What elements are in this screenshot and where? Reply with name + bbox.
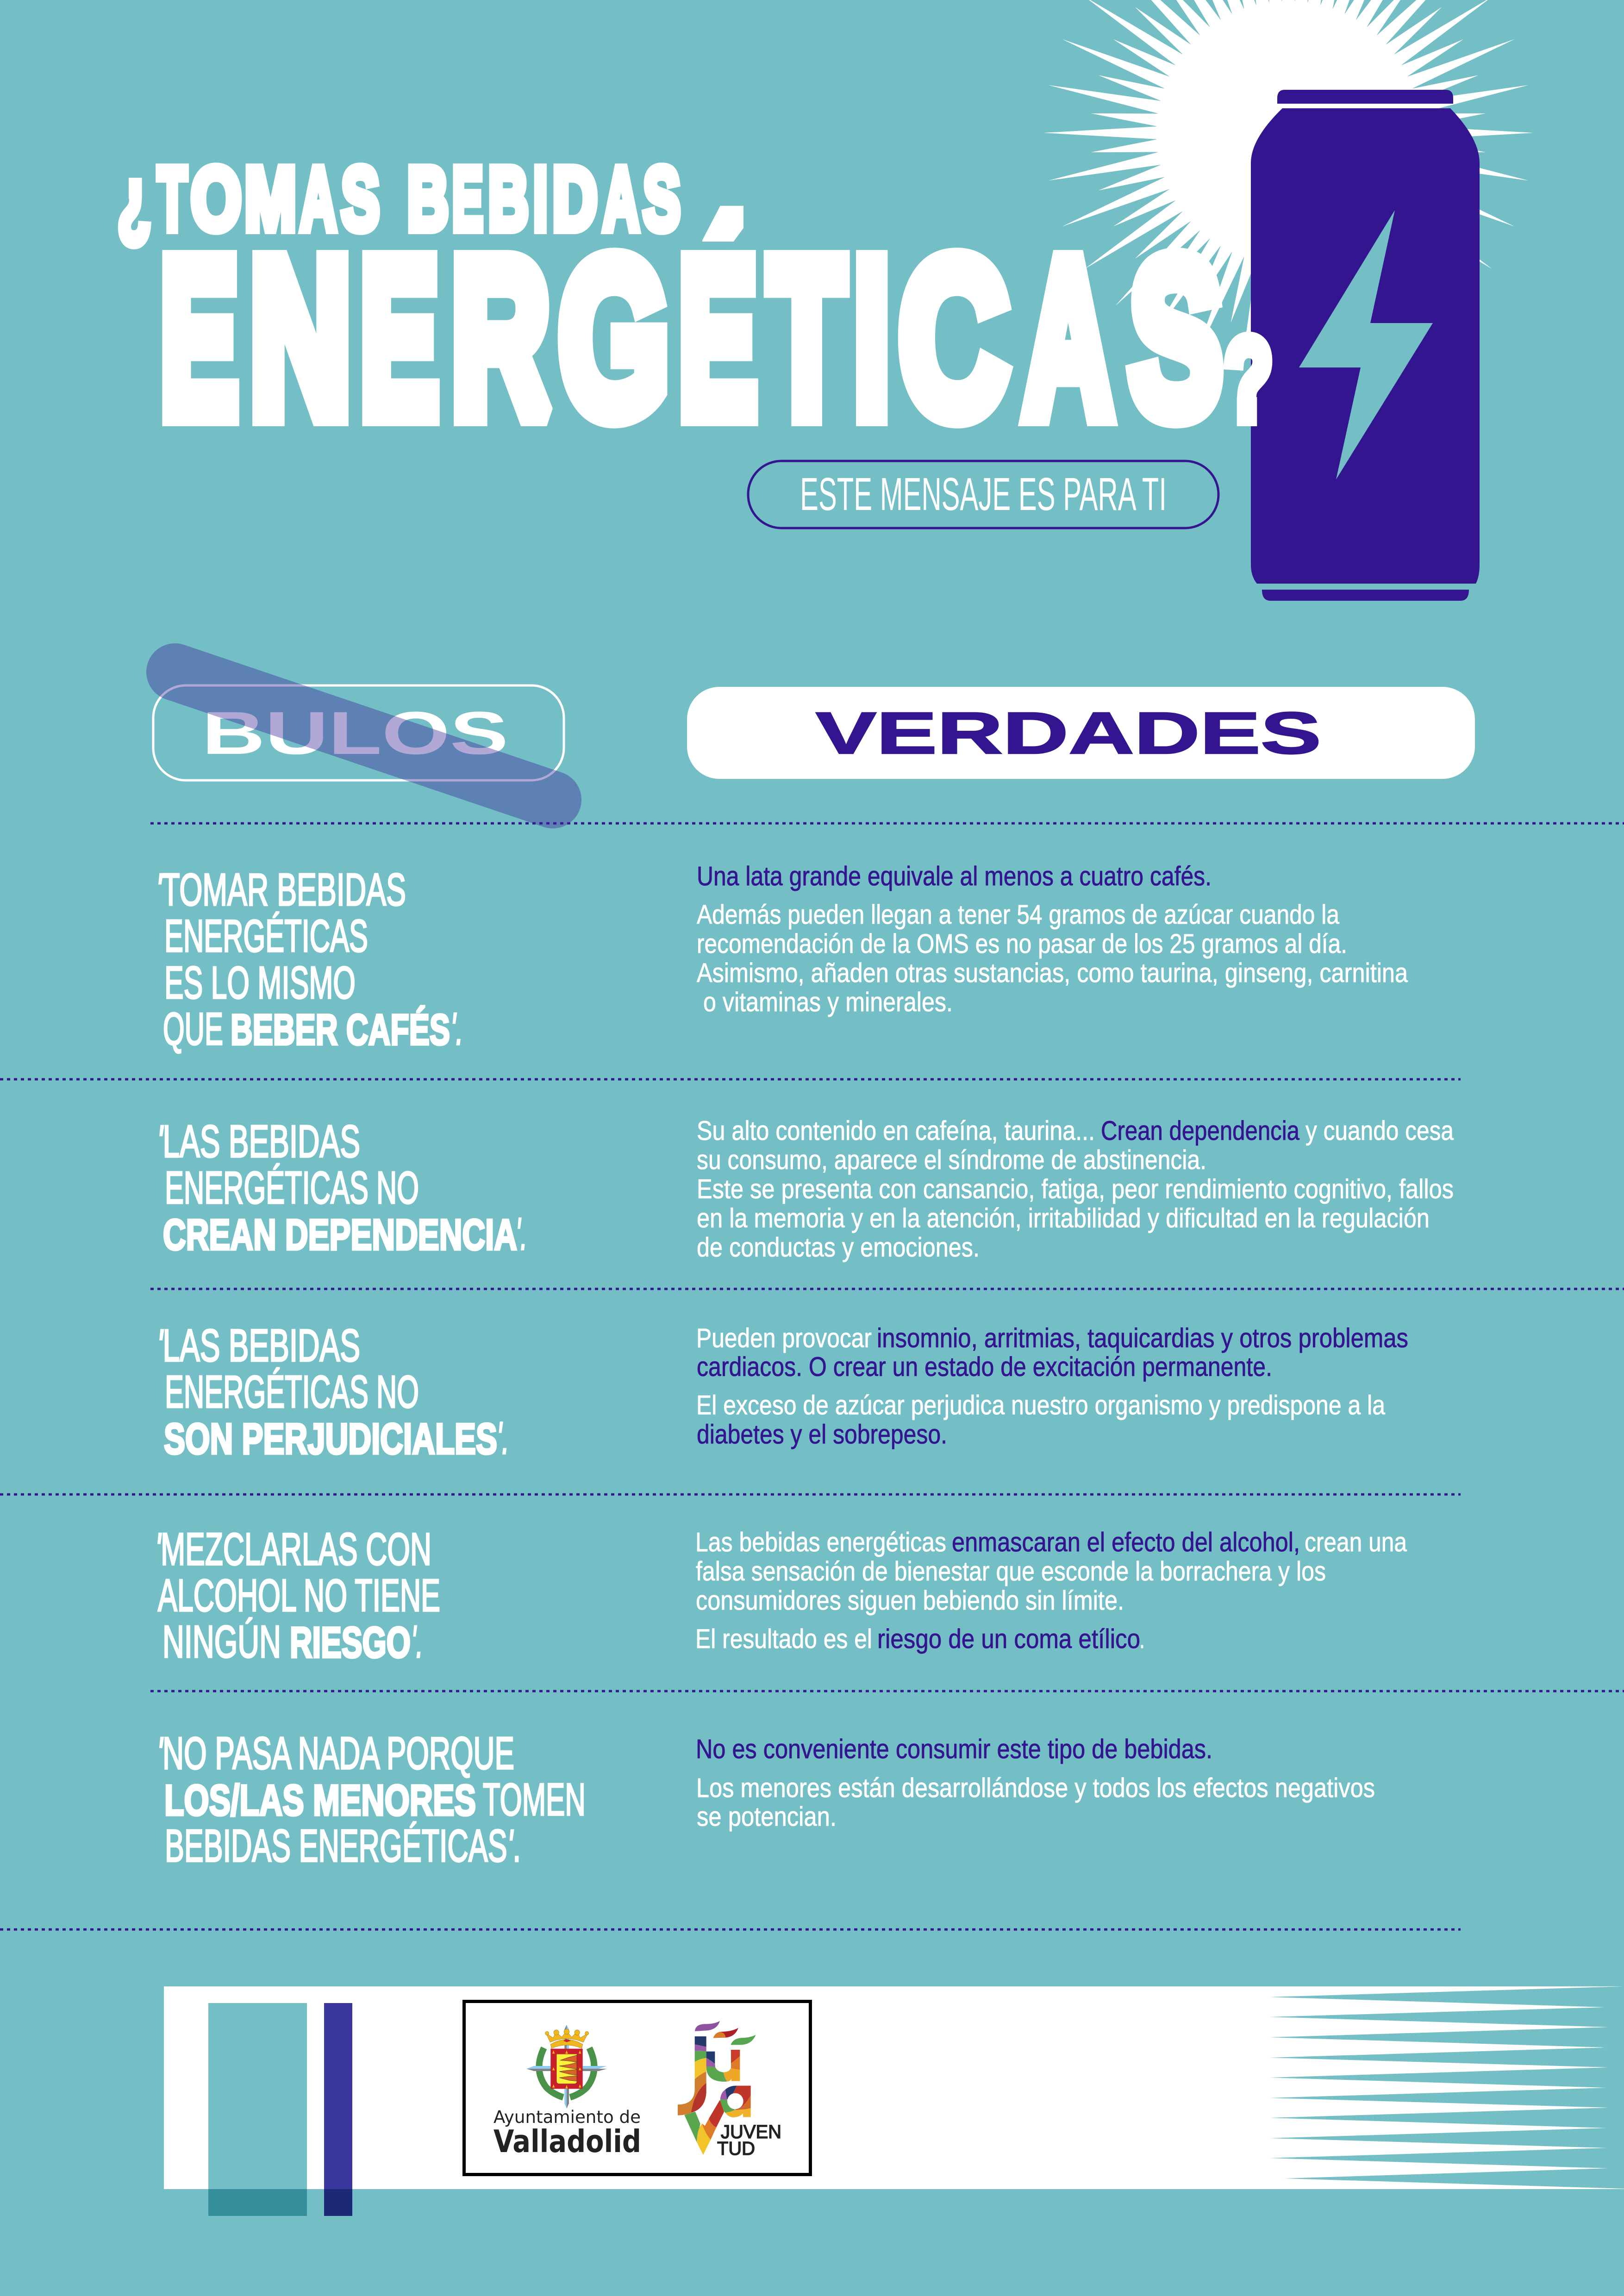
can body <box>1251 108 1480 584</box>
bulo 5: BEBIDAS ENERGÉTICAS'. <box>165 1820 521 1871</box>
crown <box>545 2029 589 2048</box>
verdad 3: diabetes y el sobrepeso. <box>697 1419 947 1450</box>
title line 2: I <box>854 213 890 462</box>
title line 1: A <box>603 149 639 249</box>
separator 2 <box>0 1078 1461 1080</box>
bulo 1 <box>156 864 463 1054</box>
verdad 1: o vitaminas y minerales. <box>703 987 953 1017</box>
bulo 5: TOMEN <box>483 1774 586 1825</box>
title line 2: R <box>452 213 550 462</box>
verdad 3: El exceso de azúcar perjudica nuestro organismo y predispone a la <box>696 1390 1386 1420</box>
bulo 4: NINGÚN <box>162 1616 281 1667</box>
verdad 5: se potencian. <box>697 1802 837 1832</box>
verdad 2: Este se presenta con cansancio, fatiga, peor rendimiento cognitivo, fallos <box>697 1174 1454 1204</box>
bulo 4: RIESGO <box>290 1618 411 1667</box>
bulo 3 <box>157 1320 509 1463</box>
verdad 4: enmascaran el efecto del alcohol, <box>952 1527 1300 1557</box>
bulo 4: ALCOHOL NO TIENE <box>158 1570 440 1621</box>
bulo 4: '. <box>411 1616 423 1667</box>
separator 3 <box>150 1288 1624 1290</box>
bulo 2: CREAN DEPENDENCIA <box>163 1210 517 1259</box>
Juventud wordmark: JUVEN <box>721 2121 781 2142</box>
subtitle pill: ESTE MENSAJE ES PARA TI <box>800 468 1167 520</box>
verdad 4: consumidores siguen bebiendo sin límite. <box>696 1586 1124 1616</box>
verdad 4: falsa sensación de bienestar que esconde la borrachera y los <box>696 1556 1326 1587</box>
title line 2: E <box>161 213 238 462</box>
icon: Valladolid coat of arms <box>526 2025 607 2109</box>
title line 1: D <box>553 149 597 249</box>
title line 2: A <box>1024 213 1112 462</box>
bulo 3: 'LAS BEBIDAS <box>157 1320 360 1371</box>
can lid <box>1277 90 1453 104</box>
title line 1: A <box>300 149 337 249</box>
verdad 4: Las bebidas energéticas <box>695 1527 946 1557</box>
verdad 1: Una lata grande equivale al menos a cuatro cafés. <box>697 861 1212 891</box>
V <box>684 2112 700 2142</box>
verdad 2: Crean dependencia <box>1101 1116 1300 1146</box>
bulo 3: ENERGÉTICAS NO <box>165 1366 419 1417</box>
verdad 2: Su alto contenido en cafeína, taurina... <box>697 1116 1095 1146</box>
title line 2: T <box>769 213 845 462</box>
verdad 2: su consumo, aparece el síndrome de abstinencia. <box>697 1145 1206 1175</box>
bulo 1: BEBER CAFÉS <box>231 1005 450 1054</box>
title line 1: O <box>191 149 241 249</box>
a <box>720 2090 727 2100</box>
verdad 2: de conductas y emociones. <box>697 1232 980 1263</box>
panel: logos box <box>464 2001 810 2174</box>
verdad 5: Los menores están desarrollándose y todos los efectos negativos <box>696 1773 1375 1803</box>
verdad 1: recomendación de la OMS es no pasar de los 25 gramos al día. <box>697 929 1347 959</box>
icon: white sunburst <box>1002 0 1575 419</box>
verdad 2: en la memoria y en la atención, irritabilidad y dificultad en la regulación <box>697 1203 1430 1233</box>
verdad 5: No es conveniente consumir este tipo de bebidas. <box>696 1734 1212 1764</box>
panel: footer band <box>164 1986 1624 2216</box>
verdad 4: El resultado es el <box>695 1624 872 1654</box>
J <box>695 2036 706 2047</box>
verdad 1 <box>697 861 1408 1017</box>
bulo 5: LOS/LAS MENORES <box>164 1776 476 1824</box>
separator 4 <box>0 1493 1461 1496</box>
shield <box>550 2049 583 2089</box>
title line 2: É <box>679 213 757 462</box>
leaves <box>695 2021 720 2031</box>
title line 2: N <box>250 213 351 462</box>
verdad 2: y cuando cesa <box>1305 1116 1454 1146</box>
verdad 3: cardiacos. O crear un estado de excitación permanente. <box>697 1352 1272 1382</box>
bulo 4 <box>155 1524 440 1667</box>
bulo 1: 'TOMAR BEBIDAS <box>156 864 406 915</box>
bulo 5: 'NO PASA NADA PORQUE <box>157 1728 514 1779</box>
bulo 1: QUE <box>163 1003 223 1054</box>
sword <box>526 2025 607 2109</box>
title line 2: S <box>1130 213 1222 462</box>
can base rim <box>1262 590 1469 601</box>
title line 1: B <box>488 149 529 249</box>
title line 1: M <box>244 149 296 249</box>
verdad 1: Además pueden llegan a tener 54 gramos de azúcar cuando la <box>697 900 1340 930</box>
Juventud wordmark <box>717 2121 781 2159</box>
verdad 4: crean una <box>1305 1527 1407 1557</box>
verdad 3: insomnio, arritmias, taquicardias y otros problemas <box>877 1323 1408 1353</box>
title line 2: G <box>559 213 668 462</box>
bulo 3: '. <box>497 1412 509 1463</box>
title line 1: S <box>342 149 380 249</box>
bulo 2: '. <box>516 1208 527 1259</box>
u <box>706 2052 715 2064</box>
icon: Juventud logo <box>678 2021 781 2159</box>
bulo 5 <box>157 1728 586 1871</box>
separator 6 <box>0 1928 1461 1931</box>
bulo 4: 'MEZCLARLAS CON <box>155 1524 431 1574</box>
verdad 2 <box>697 1116 1454 1263</box>
blue decorative bar <box>324 2003 352 2216</box>
Ayuntamiento de Valladolid wordmark: Valladolid <box>493 2123 641 2159</box>
icon: energy drink can <box>1251 90 1480 601</box>
panel: VERDADES heading <box>687 687 1475 779</box>
title line 2: ? <box>1225 315 1272 444</box>
verdad 5 <box>696 1734 1375 1832</box>
teal decorative bar <box>208 2003 307 2216</box>
title line 2: E <box>361 213 438 462</box>
title line 1: B <box>407 149 449 249</box>
subtitle pill <box>748 461 1218 528</box>
verdad 3: Pueden provocar <box>696 1323 872 1353</box>
Juventud wordmark: TUD <box>717 2138 755 2159</box>
Ayuntamiento de Valladolid wordmark: Ayuntamiento de <box>493 2107 641 2127</box>
verdad 3 <box>696 1323 1408 1450</box>
icon: lightning bolt <box>1299 210 1433 479</box>
bulo 2 <box>157 1116 527 1259</box>
verdad 4: . <box>1139 1624 1145 1654</box>
title line 1: E <box>452 149 483 249</box>
bulo 2: 'LAS BEBIDAS <box>157 1116 360 1167</box>
title line 1: S <box>643 149 680 249</box>
panel: VERDADES heading: VERDADES <box>816 700 1321 766</box>
spikes on right of footer <box>1269 1986 1624 2189</box>
bulo 3: SON PERJUDICIALES <box>164 1414 497 1463</box>
strike-through bar <box>175 672 553 800</box>
panel: BULOS heading <box>153 672 564 800</box>
title line 2: C <box>899 213 1007 462</box>
bulo 2: ENERGÉTICAS NO <box>165 1162 419 1213</box>
verdad 1: Asimismo, añaden otras sustancias, como taurina, ginseng, carnitina <box>697 958 1408 988</box>
bulo 1: '. <box>450 1003 463 1054</box>
wreath <box>539 2048 594 2097</box>
separator 5 <box>150 1690 1624 1692</box>
bulo 1: ENERGÉTICAS <box>164 910 368 961</box>
verdad 4 <box>695 1527 1407 1654</box>
Ayuntamiento de Valladolid wordmark <box>493 2107 641 2159</box>
title line 1: T <box>157 149 187 249</box>
panel: BULOS heading: BULOS <box>202 699 508 767</box>
title line 1: ¿ <box>118 149 151 249</box>
title line 1: I <box>533 149 548 249</box>
bulo 1: ES LO MISMO <box>164 957 356 1008</box>
verdad 4: riesgo de un coma etílico <box>877 1624 1140 1654</box>
separator line under headings <box>150 822 1624 825</box>
